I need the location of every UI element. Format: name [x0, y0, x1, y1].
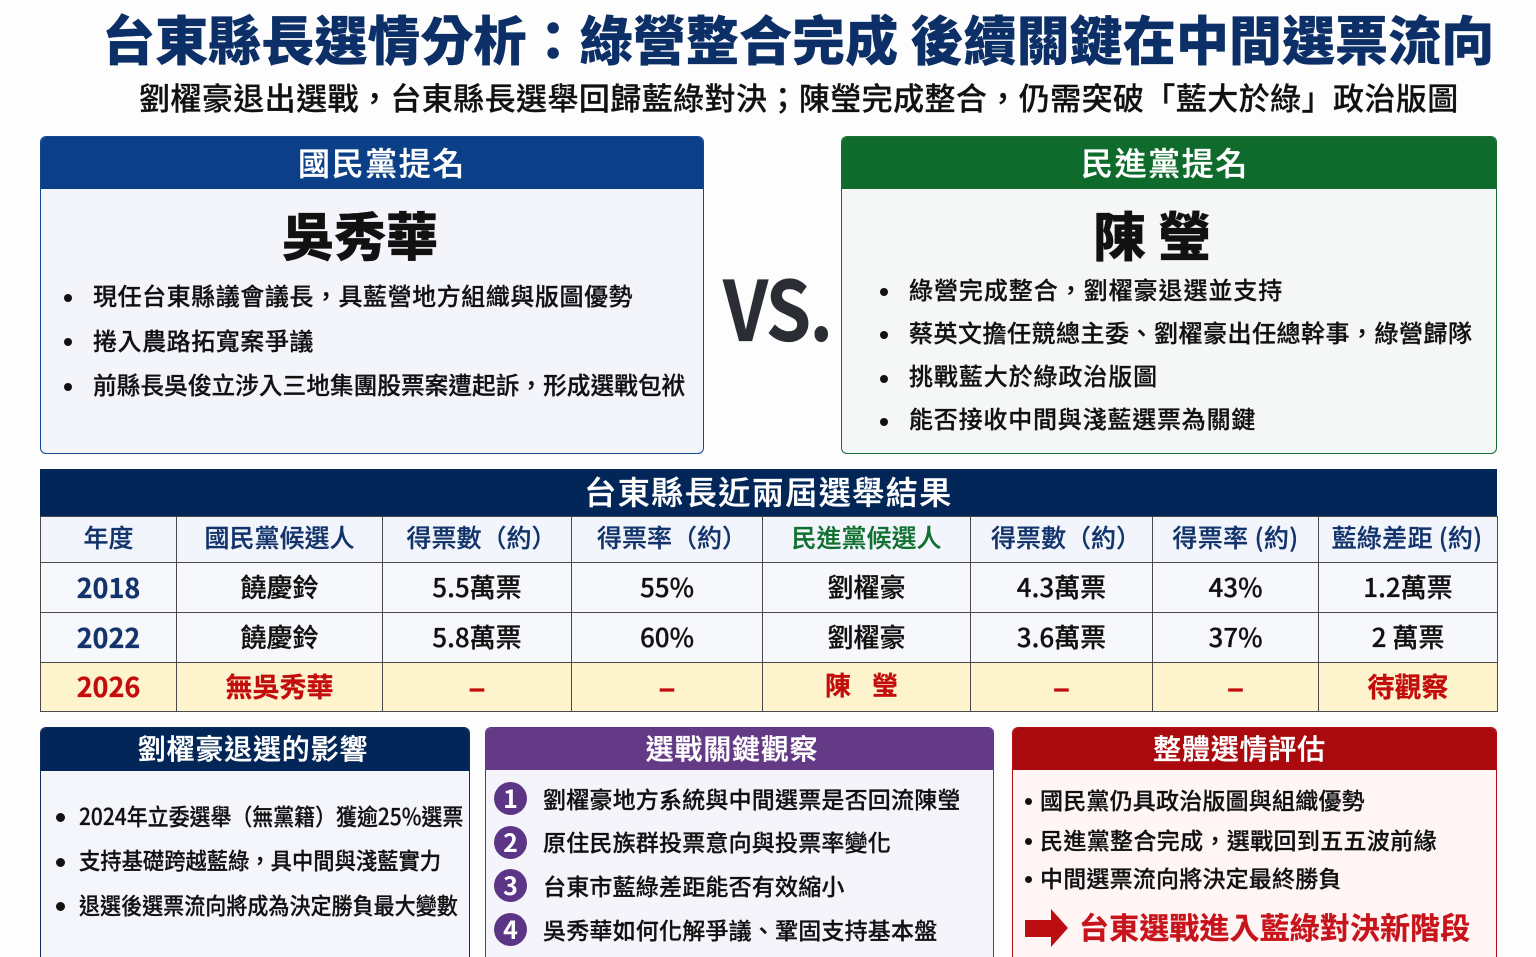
panel heading: impact: 劉櫂豪退選的影響 [138, 728, 368, 768]
bullet list: KMT: 捲入農路拓寬案爭議 [93, 322, 314, 357]
table title bar [40, 469, 1497, 516]
election results table: 2026 [77, 666, 140, 704]
panel: key observations [485, 727, 994, 957]
election results table: 3.6萬票 [1017, 618, 1106, 654]
election results table: 陳瑩 [825, 666, 919, 703]
election results table: – [658, 662, 676, 708]
VS label: VS. [723, 245, 831, 365]
numbered list: observations: 台東市藍綠差距能否有效縮小 [543, 868, 845, 902]
bullet list: DPP: 蔡英文擔任競總主委、劉櫂豪出任總幹事，綠營歸隊 [909, 314, 1472, 349]
icon: red arrow [1025, 909, 1068, 947]
panel heading: assessment [1013, 728, 1496, 770]
numbered list: observations: 1 [503, 780, 518, 816]
panel heading: assessment: 整體選情評估 [1153, 728, 1326, 768]
election results table: 1.2萬票 [1363, 568, 1453, 604]
election results table: 2022 [77, 617, 140, 656]
election results table: 55% [640, 568, 694, 604]
conclusion callout: 台東選戰進入藍綠對決新階段 [1079, 904, 1470, 948]
bullet list: KMT: 前縣長吳俊立涉入三地集團股票案遭起訴，形成選戰包袱 [93, 366, 685, 401]
bullet list: assessment: 民進黨整合完成，選戰回到五五波前緣 [1040, 822, 1437, 856]
title: 台東縣長選情分析：綠營整合完成 後續關鍵在中間選票流向 [102, 0, 1494, 76]
panel heading: DPP: 民進黨提名 [1081, 139, 1249, 185]
election results table: 37% [1208, 618, 1263, 654]
bullet list: KMT [64, 277, 685, 401]
panel heading: KMT [41, 137, 703, 189]
bullet list: impact: 支持基礎跨越藍綠，具中間與淺藍實力 [79, 842, 441, 876]
election results table [40, 516, 1498, 712]
panel heading: impact [41, 728, 469, 771]
election results table: – [1227, 662, 1244, 708]
table title bar: 台東縣長近兩屆選舉結果 [584, 468, 953, 514]
numbered list: observations: 劉櫂豪地方系統與中間選票是否回流陳瑩 [543, 781, 961, 815]
election results table: 得票率（約） [597, 519, 747, 555]
election results table: 得票數（約） [406, 519, 556, 555]
numbered list: observations [494, 780, 961, 947]
bullet list: DPP: 挑戰藍大於綠政治版圖 [909, 357, 1158, 392]
bullet list: DPP: 綠營完成整合，劉櫂豪退選並支持 [909, 271, 1283, 306]
numbered list: observations: 吳秀華如何化解爭議、鞏固支持基本盤 [543, 912, 937, 946]
election results table: 4.3萬票 [1017, 568, 1106, 604]
bullet list: DPP: 能否接收中間與淺藍選票為關鍵 [909, 400, 1256, 435]
election results table: 43% [1208, 568, 1263, 604]
panel heading: DPP [842, 137, 1496, 189]
numbered list: observations: 4 [503, 911, 518, 947]
subtitle: 劉櫂豪退出選戰，台東縣長選舉回歸藍綠對決；陳瑩完成整合，仍需突破「藍大於綠」政治版圖 [139, 74, 1459, 119]
bullet list: assessment: 國民黨仍具政治版圖與組織優勢 [1040, 782, 1365, 816]
election results table: 民進黨候選人 [791, 519, 942, 555]
panel heading: observations: 選戰關鍵觀察 [646, 728, 818, 768]
election results table: – [468, 662, 486, 708]
election results table: 劉櫂豪 [827, 618, 906, 654]
numbered list: observations: 3 [503, 867, 518, 903]
bullet list: DPP [880, 271, 1472, 435]
bullet list: impact: 2024年立委選舉（無黨籍）獲逾25%選票 [79, 798, 463, 832]
election results table: 5.5萬票 [432, 568, 522, 604]
election results table: 得票率 (約) [1172, 519, 1299, 555]
election results table: 藍綠差距 (約) [1332, 519, 1482, 555]
numbered list: observations: 2 [503, 824, 518, 860]
election results table: 60% [640, 618, 694, 654]
election results table: 年度 [83, 519, 134, 555]
numbered list: observations: 原住民族群投票意向與投票率變化 [543, 824, 891, 858]
election results table: 5.8萬票 [432, 618, 522, 654]
election results table: – [1053, 662, 1070, 708]
election results table: 國民黨候選人 [204, 519, 354, 555]
election results table: 饒慶鈴 [240, 568, 318, 604]
candidate name: Chen: 陳瑩 [1093, 196, 1223, 272]
election results table: 待觀察 [1368, 666, 1448, 704]
bullet list: impact: 退選後選票流向將成為決定勝負最大變數 [79, 887, 458, 921]
election results table: 饒慶鈴 [240, 618, 318, 654]
election results table: 2 萬票 [1372, 618, 1444, 654]
election results table: 劉櫂豪 [827, 568, 906, 604]
bullet list: assessment: 中間選票流向將決定最終勝負 [1040, 860, 1342, 894]
panel: KMT nomination [40, 136, 704, 454]
election results table: 得票數（約） [991, 519, 1141, 555]
election results table: 2018 [77, 567, 140, 606]
panel: DPP nomination [841, 136, 1497, 454]
election results table: 無吳秀華 [226, 666, 334, 704]
panel: impact of withdrawal [40, 727, 470, 957]
candidate name: Wu: 吳秀華 [282, 196, 438, 271]
panel heading: observations [486, 728, 993, 770]
bullet list: KMT: 現任台東縣議會議長，具藍營地方組織與版圖優勢 [93, 277, 633, 312]
panel heading: KMT: 國民黨提名 [298, 139, 466, 185]
panel: overall assessment [1012, 727, 1497, 957]
bullet list: assessment [1025, 782, 1437, 894]
bullet list: impact [56, 798, 463, 921]
